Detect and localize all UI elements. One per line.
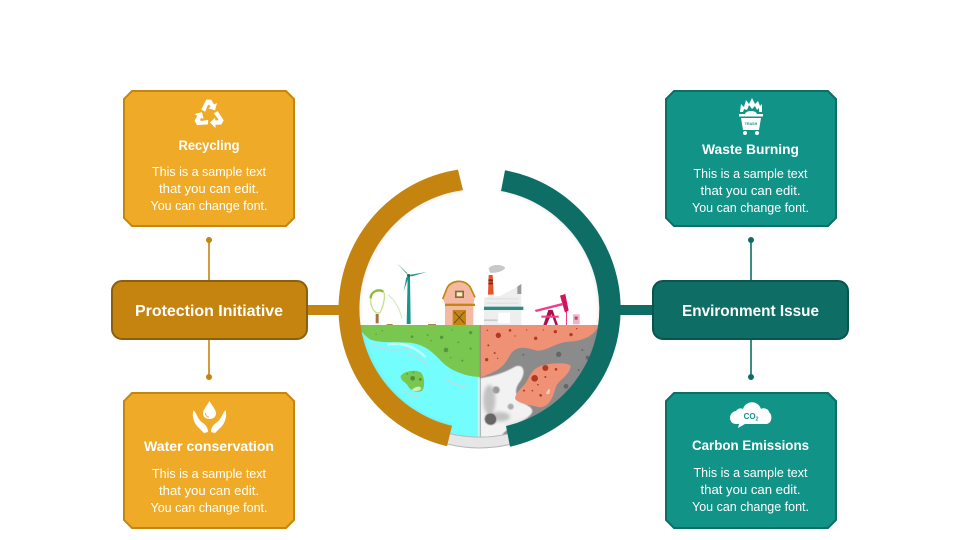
upper scene buildings bbox=[371, 263, 580, 325]
icon: recycling arrows bbox=[192, 100, 226, 130]
hub: protection initiative bbox=[112, 281, 307, 339]
body text: that you can edit. bbox=[159, 182, 259, 196]
body text: that you can edit. bbox=[700, 184, 800, 198]
body text: You can change font. bbox=[692, 201, 809, 215]
body text: This is a sample text bbox=[152, 467, 267, 481]
cloud label: 2 bbox=[756, 416, 759, 422]
island bbox=[401, 371, 424, 392]
factory bbox=[484, 265, 523, 325]
hub title: Environment Issue bbox=[682, 303, 819, 320]
connector: environment issue to waste burning bbox=[748, 237, 754, 281]
connector: right hub to ring bbox=[618, 305, 654, 315]
water bbox=[362, 332, 480, 437]
bottom gray ring segment bbox=[447, 433, 512, 448]
body text: that you can edit. bbox=[159, 484, 259, 498]
soil dots bbox=[485, 328, 577, 397]
soft gray haze bbox=[483, 385, 510, 421]
icon: hands holding water drop bbox=[193, 401, 226, 433]
icon label: trash: TRASH bbox=[745, 122, 758, 126]
body text: You can change font. bbox=[150, 199, 268, 213]
body text bbox=[150, 165, 268, 213]
white polluted patch bbox=[478, 366, 532, 438]
connector: left hub to ring bbox=[306, 305, 342, 315]
tree bbox=[371, 290, 402, 323]
hub title: Protection Initiative bbox=[135, 303, 283, 320]
hub: environment issue bbox=[653, 281, 848, 339]
panel: recycling bbox=[124, 91, 294, 226]
heading: Waste Burning bbox=[702, 141, 799, 157]
heading: Recycling bbox=[178, 137, 240, 153]
body text: This is a sample text bbox=[694, 466, 808, 480]
body text: You can change font. bbox=[692, 500, 809, 514]
salmon soil bbox=[480, 325, 600, 377]
cloud label: CO bbox=[744, 412, 756, 421]
heading: Water conservation bbox=[144, 438, 274, 454]
connector: protection initiative to recycling bbox=[206, 237, 212, 281]
ring: teal arc bbox=[501, 170, 621, 447]
central illustration: land, water and pollution bbox=[357, 263, 603, 448]
ring shadow: subtle inner edge bbox=[359, 190, 599, 426]
icon: CO2 cloud bbox=[730, 402, 771, 428]
panel: water conservation bbox=[124, 393, 294, 528]
body text bbox=[692, 466, 809, 514]
icon: burning dumpster bbox=[739, 98, 763, 135]
salmon soil patch bbox=[515, 363, 571, 407]
body text bbox=[692, 167, 809, 215]
lower ground scene bbox=[357, 325, 603, 438]
barn bbox=[443, 281, 475, 325]
oil pump bbox=[535, 294, 580, 325]
body text: This is a sample text bbox=[152, 165, 267, 179]
green land dots bbox=[375, 329, 472, 362]
gray smudges bbox=[485, 386, 514, 425]
ground dots on horizon bbox=[387, 324, 436, 325]
body text bbox=[150, 467, 268, 515]
water ripples bbox=[372, 344, 474, 396]
body text: that you can edit. bbox=[700, 483, 800, 497]
panel: waste burning bbox=[666, 91, 836, 226]
connector: protection initiative to water conservation bbox=[206, 339, 212, 380]
body text: This is a sample text bbox=[694, 167, 808, 181]
heading: Carbon Emissions bbox=[692, 437, 809, 453]
panel: carbon emissions bbox=[666, 393, 836, 528]
green land bbox=[357, 325, 480, 377]
connector: environment issue to carbon emissions bbox=[748, 339, 754, 380]
body text: You can change font. bbox=[150, 501, 268, 515]
polluted gray ground bbox=[480, 328, 598, 435]
wind turbine bbox=[397, 263, 427, 324]
ring: gold arc bbox=[339, 170, 463, 446]
